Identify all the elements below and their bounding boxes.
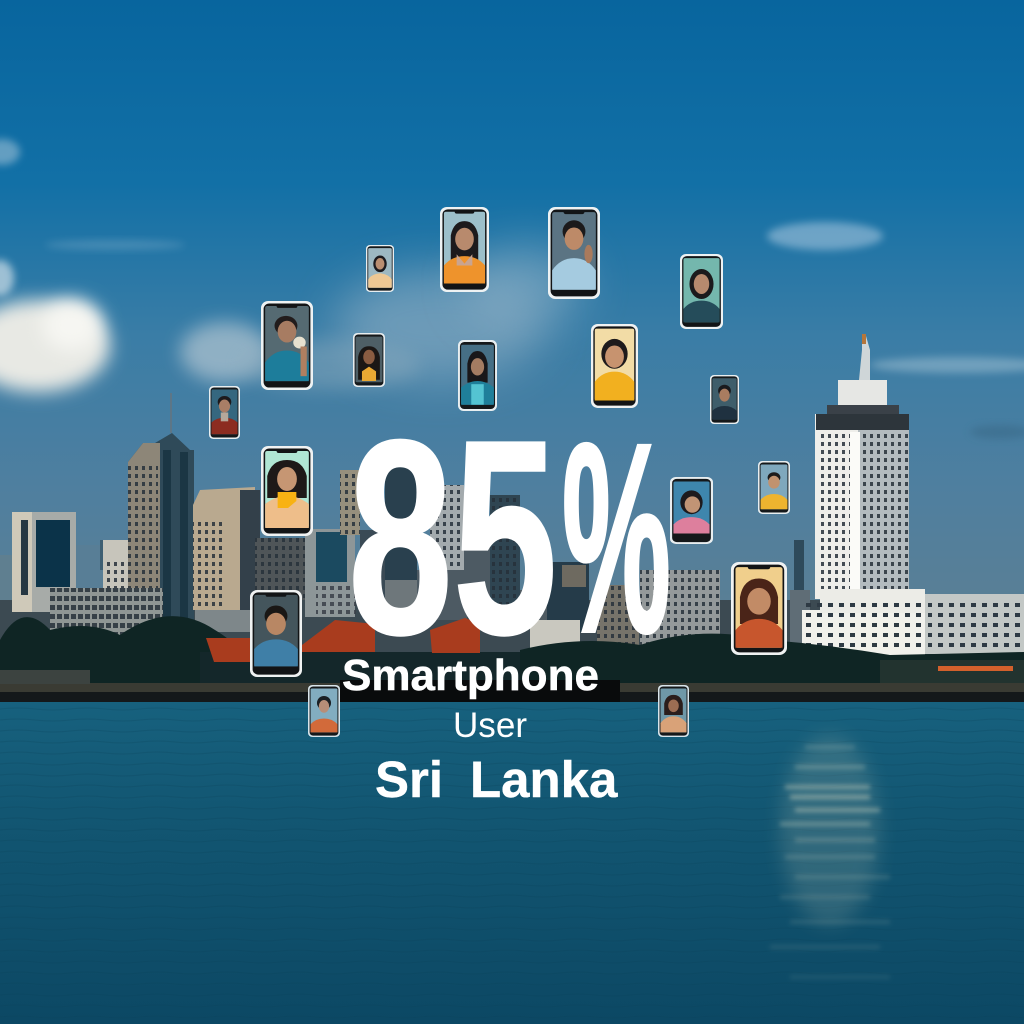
sun reflection: [780, 735, 880, 925]
phone 8: [591, 324, 638, 408]
phone 4: [680, 254, 723, 329]
clouds: [0, 139, 1024, 439]
phone 15: [250, 590, 302, 677]
right mid-rise buildings: [597, 570, 720, 652]
dark tall tower: [128, 393, 194, 625]
label: Smartphone: Smartphone: [342, 651, 599, 700]
left office block: [12, 512, 76, 612]
big number 85%: %: [562, 389, 671, 689]
phone 1: [366, 245, 394, 292]
label: User: User: [453, 706, 527, 745]
phone 6: [353, 333, 385, 387]
white landmark tower: [815, 334, 909, 600]
phone 14: [731, 562, 787, 655]
city skyline: [0, 334, 1024, 702]
label: Sri Lanka: Lanka: [470, 751, 618, 808]
sky background: [0, 0, 1024, 610]
phone 12: [670, 477, 713, 544]
phone 10: [209, 386, 240, 439]
phone 5: [261, 301, 313, 390]
label: Sri Lanka: Sri: [375, 751, 443, 808]
waterfront wall: [0, 670, 1024, 702]
phone 17: [658, 685, 689, 737]
big number 85%: [348, 384, 671, 693]
phone 11: [261, 446, 313, 536]
phone 13: [758, 461, 790, 514]
phone 2: [440, 207, 489, 292]
tree line: [0, 616, 1024, 690]
low white block: [103, 540, 130, 590]
big number 85%: 85: [348, 384, 558, 693]
far haze buildings: [0, 540, 1024, 670]
phone 9: [710, 375, 739, 424]
low block left: [50, 588, 255, 638]
white low-rise complex: [802, 589, 1024, 655]
beige tower: [193, 487, 305, 610]
red roofs: [206, 618, 1013, 671]
buildings behind the figures: [340, 462, 589, 650]
phone 16: [308, 685, 340, 737]
phone 7: [458, 340, 497, 411]
sea: [0, 702, 1024, 1024]
phone 3: [548, 207, 600, 299]
teal glass building: [305, 529, 356, 617]
lattice tower: [790, 540, 810, 650]
